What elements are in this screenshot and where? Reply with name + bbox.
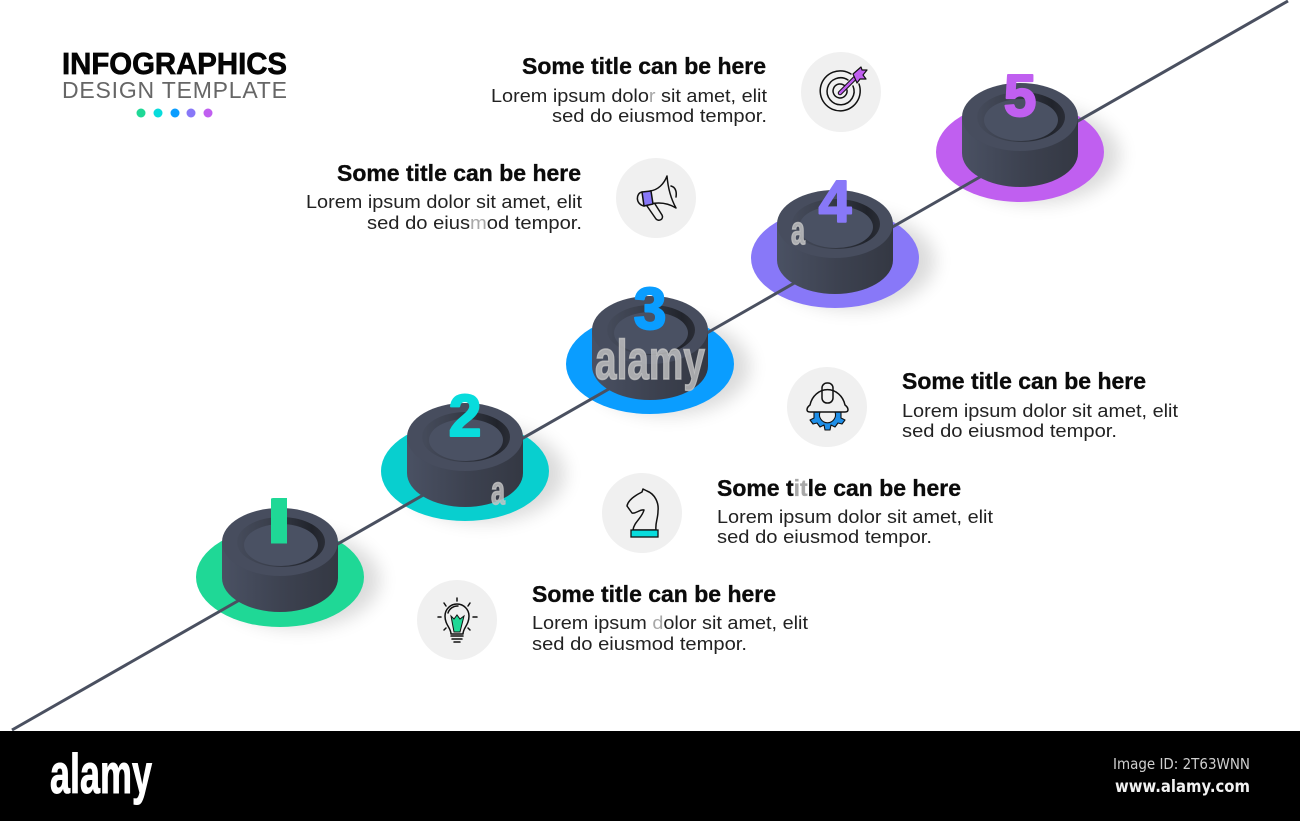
step 1 puck and number: 1 bbox=[246, 485, 308, 557]
logo dots bbox=[136, 108, 212, 118]
footer logo: alamy bbox=[50, 742, 152, 805]
logo heading: INFOGRAPHICS bbox=[62, 46, 287, 81]
step 5 text: Lorem ipsum dolo r sit amet, elit bbox=[491, 85, 767, 106]
step 2 text bbox=[717, 475, 993, 547]
step 4 text: Lorem ipsum dolor sit amet, elit bbox=[306, 191, 582, 212]
step 3 icon: helmet and gear bbox=[787, 367, 867, 447]
step 3 text: sed do eiusmod tempor. bbox=[902, 420, 1117, 441]
disc 5 bbox=[936, 102, 1120, 203]
step 2 text: Lorem ipsum dolor sit amet, elit bbox=[717, 506, 993, 527]
step 5 puck and number: 5 bbox=[1004, 63, 1036, 129]
step 3 text bbox=[902, 368, 1178, 441]
step 4 text: sed do eius mod tempor. bbox=[367, 212, 582, 233]
step 4 puck and number: 4 bbox=[819, 169, 852, 235]
step 2 text: sed do eiusmod tempor. bbox=[717, 526, 932, 547]
step 2 puck and number bbox=[407, 383, 523, 507]
step 5 puck and number bbox=[962, 63, 1078, 187]
step 4 text bbox=[306, 160, 582, 233]
website: www.alamy.com bbox=[1115, 777, 1250, 797]
step 4 icon: megaphone bbox=[616, 158, 696, 238]
step 1 puck and number bbox=[222, 498, 338, 612]
step 1 text: Lorem ipsum dolor sit amet, elit bbox=[532, 612, 808, 633]
centre watermark: alamy bbox=[595, 328, 705, 391]
step 3 text: Some title can be here bbox=[902, 368, 1146, 394]
step 5 icon: target bbox=[801, 52, 881, 132]
watermark letter on puck 2: a bbox=[491, 469, 505, 513]
disc 3 bbox=[566, 314, 750, 415]
watermark letter on puck 4: a bbox=[791, 209, 805, 253]
step 1 text bbox=[532, 581, 808, 654]
coloured base discs bbox=[196, 102, 1120, 628]
step 4 text: Some title can be here bbox=[337, 160, 581, 186]
step 1 text: Some title can be here bbox=[532, 581, 776, 607]
logo subheading: DESIGN TEMPLATE bbox=[62, 77, 287, 103]
step 3 text: Lorem ipsum dolor sit amet, elit bbox=[902, 400, 1178, 421]
step 1 icon: light bulb bbox=[417, 580, 497, 660]
step 2 icon: chess knight bbox=[602, 473, 682, 553]
step 1 text: sed do eiusmod tempor. bbox=[532, 633, 747, 654]
step 3 puck and number: 3 bbox=[634, 276, 666, 342]
step 3 puck and number bbox=[592, 276, 708, 400]
step 5 text: Some title can be here bbox=[522, 53, 766, 79]
step 2 text: Some title can be here bbox=[717, 475, 961, 501]
step 2 puck and number: 2 bbox=[449, 383, 481, 449]
step 5 text: sed do eiusmod tempor. bbox=[552, 105, 767, 126]
image id: Image ID: 2T63WNN bbox=[1113, 755, 1250, 773]
step 4 puck and number bbox=[777, 169, 893, 294]
step 5 text bbox=[491, 53, 767, 126]
footer bar bbox=[0, 731, 1300, 821]
disc 1 bbox=[196, 527, 380, 628]
disc 2 bbox=[381, 421, 565, 522]
logo block bbox=[62, 46, 287, 118]
disc 4 bbox=[751, 208, 935, 309]
